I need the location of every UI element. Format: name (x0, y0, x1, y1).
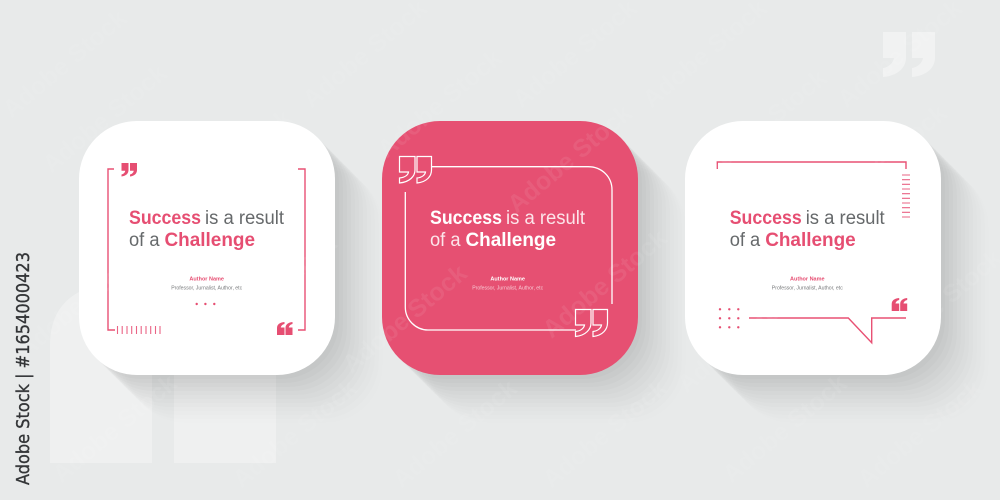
stock watermarks: Adobe Stock (537, 374, 672, 494)
frame top right (432, 167, 612, 304)
author name: Author Name (189, 276, 224, 282)
headline: is a result (806, 208, 885, 229)
stock watermarks: Adobe Stock (207, 229, 342, 349)
headline: is a result (205, 208, 285, 229)
headline: Success (730, 208, 802, 229)
long shadow: card 3 (689, 125, 989, 423)
headline: of a (430, 230, 461, 251)
stock watermarks: Adobe Stock (162, 104, 297, 224)
headline: Challenge (466, 230, 556, 251)
frame bottom left (405, 192, 576, 330)
three dots (196, 303, 216, 305)
dot grid (719, 308, 740, 328)
author role: Professor, Jurnalist, Author, etc (772, 286, 843, 292)
long shadow: card 2 (386, 125, 686, 423)
author role: Professor, Jurnalist, Author, etc (171, 286, 242, 292)
long shadow: card 1 (83, 125, 383, 423)
stock watermarks: Adobe Stock (502, 99, 637, 219)
headline: Challenge (164, 230, 255, 251)
card background (685, 121, 941, 375)
stock watermarks: Adobe Stock (717, 369, 852, 489)
author role: Professor, Jurnalist, Author, etc (472, 286, 543, 292)
stock watermarks: Adobe Stock (672, 279, 807, 399)
stock watermarks: Adobe Stock (697, 64, 832, 184)
left bracket (108, 169, 115, 330)
panel: pink card with outline frame (382, 121, 638, 375)
card background (79, 121, 335, 375)
headline: Success (129, 208, 201, 229)
panel: white card with brackets (79, 121, 335, 375)
stock watermarks: Adobe Stock (12, 244, 147, 364)
stock watermarks: Adobe Stock (0, 4, 132, 124)
stock watermarks: Adobe Stock (537, 224, 672, 344)
right bracket (298, 169, 305, 330)
stock watermarks: Adobe Stock (47, 369, 182, 489)
icon: outline bottom quote (576, 310, 608, 336)
stock watermarks: Adobe Stock (227, 374, 362, 494)
stock watermarks: Adobe Stock (337, 259, 472, 379)
author name: Author Name (490, 276, 525, 282)
tick marks (118, 326, 160, 334)
panel: white card with speech line (685, 121, 941, 375)
author name: Author Name (790, 276, 825, 282)
headline: is a result (506, 208, 586, 229)
headline: of a (129, 230, 160, 251)
stock watermarks: Adobe Stock (387, 374, 522, 494)
headline: Success (430, 208, 502, 229)
headline: Challenge (765, 230, 856, 251)
horizontal ticks (902, 175, 910, 217)
stock watermarks: Adobe Stock (372, 44, 507, 164)
icon: opening quote (277, 322, 292, 335)
background quote mark: bottom left (50, 292, 276, 463)
speech bubble line (749, 318, 906, 343)
stock watermarks: Adobe Stock (852, 374, 987, 494)
top bracket (717, 162, 906, 169)
background quote mark: top right (883, 32, 935, 77)
card background (382, 121, 638, 375)
stock watermarks: Adobe Stock (37, 59, 172, 179)
icon: outline top quote (400, 156, 432, 183)
stock id label: Adobe Stock | #1654000423 (13, 252, 34, 485)
icon: closing quote (122, 163, 137, 176)
headline (129, 208, 285, 251)
headline (430, 208, 586, 251)
stock watermarks: Adobe Stock (817, 99, 952, 219)
headline: of a (730, 230, 761, 251)
headline (730, 208, 885, 251)
icon: opening quote (892, 298, 907, 311)
